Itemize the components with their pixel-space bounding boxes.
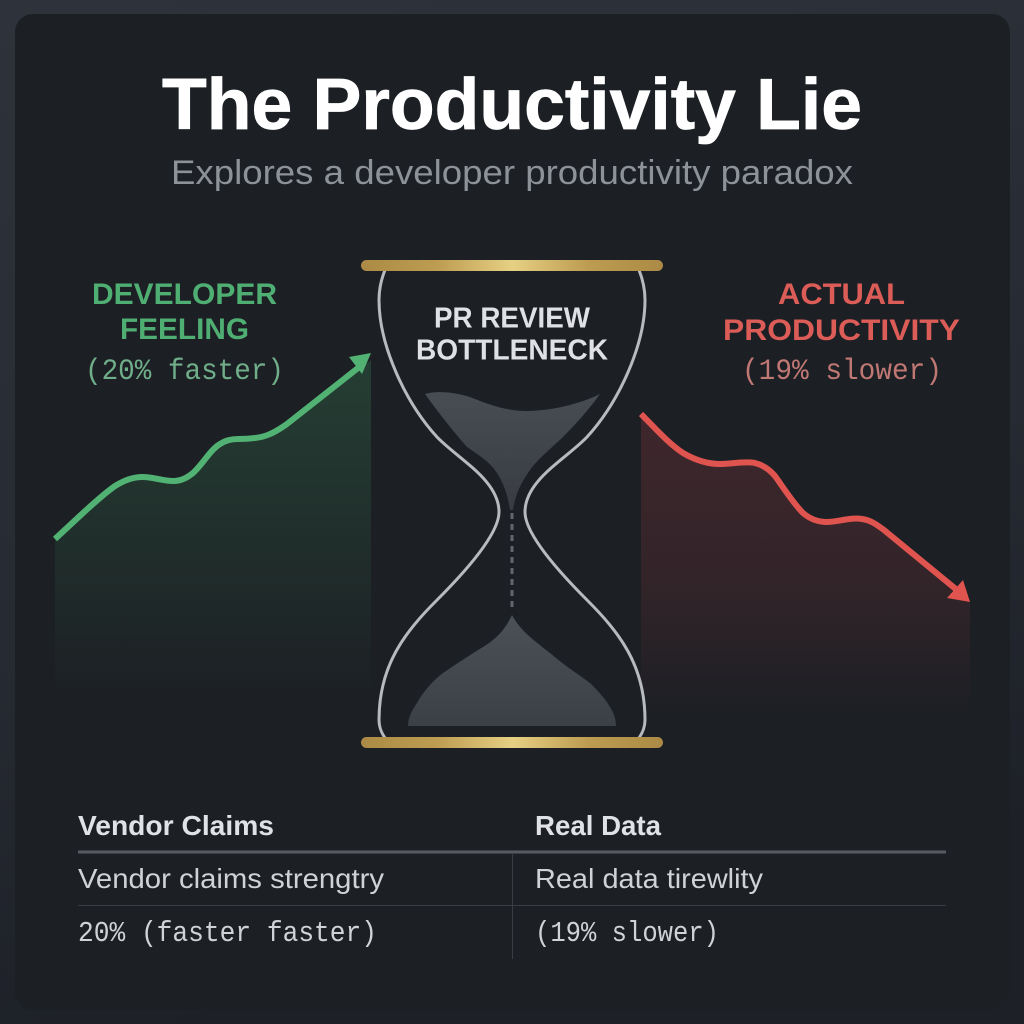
label: developer feeling: DEVELOPER xyxy=(92,278,277,311)
label: actual productivity: PRODUCTIVITY xyxy=(723,314,960,347)
arrow head: up xyxy=(349,353,371,374)
panel: developer feeling chart xyxy=(55,278,371,705)
label: actual productivity xyxy=(723,278,960,389)
bottom sand xyxy=(408,615,616,726)
table row 2: (19% slower) xyxy=(535,917,719,950)
table header: Vendor Claims xyxy=(78,810,274,841)
arrow head: down xyxy=(947,580,970,602)
hourglass label: BOTTLENECK xyxy=(416,334,608,366)
trend line: falling xyxy=(641,414,957,590)
label: developer feeling: FEELING xyxy=(120,313,249,346)
label: developer feeling: (20% faster) xyxy=(85,355,284,389)
subtitle: Explores a developer productivity paradox xyxy=(171,154,853,192)
table row 2 xyxy=(78,917,719,950)
area fill: actual productivity xyxy=(641,414,970,715)
table row 1 xyxy=(78,863,763,894)
top sand xyxy=(425,392,600,510)
panel: actual productivity chart xyxy=(641,278,970,715)
hourglass xyxy=(361,260,663,748)
label: actual productivity: (19% slower) xyxy=(742,355,942,389)
hourglass label xyxy=(416,302,608,366)
title: The Productivity Lie xyxy=(162,65,862,145)
bottom gold bar xyxy=(361,737,663,748)
trend line: rising xyxy=(55,368,358,539)
top gold bar xyxy=(361,260,663,271)
glass outline xyxy=(379,270,499,738)
falling sand stream xyxy=(510,513,514,612)
label: developer feeling xyxy=(85,278,284,389)
table row 1: Real data tirewlity xyxy=(535,863,763,894)
table row 1: Vendor claims strengtry xyxy=(78,863,384,894)
table header xyxy=(78,810,661,841)
table row 2: 20% (faster faster) xyxy=(78,917,377,950)
table header: Real Data xyxy=(535,810,661,841)
area fill: developer feeling xyxy=(55,360,371,705)
hourglass label: PR REVIEW xyxy=(434,302,591,334)
comparison table xyxy=(78,810,946,959)
label: actual productivity: ACTUAL xyxy=(778,278,905,311)
